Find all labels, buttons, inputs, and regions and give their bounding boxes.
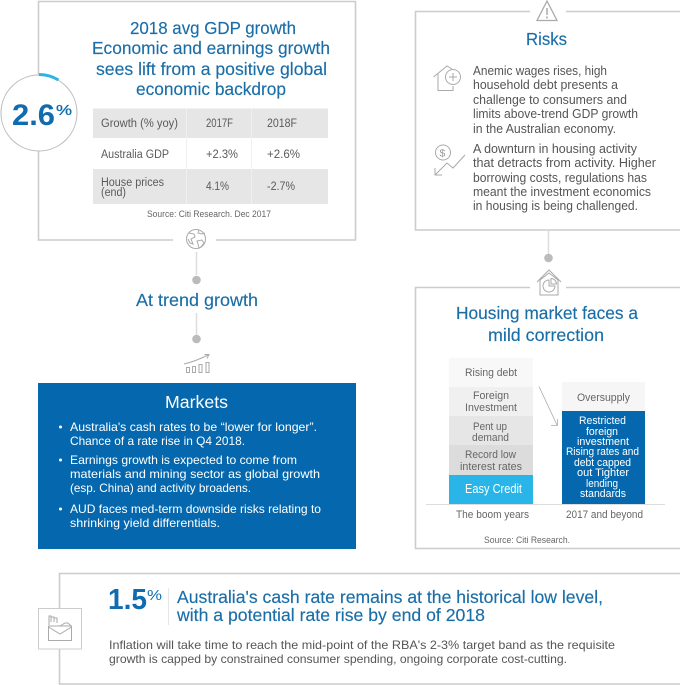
- panel: risks: [416, 1, 680, 230]
- callout: 2.6%: %: [56, 102, 72, 119]
- text: wages and debt risk: [473, 64, 638, 136]
- text: housing downturn risk: in housing is being challenged.: [473, 199, 638, 213]
- bullet: cash rates: Australia's cash rates to be “lower for longer”.: [70, 420, 317, 434]
- heading: risks: Risks: [526, 29, 567, 49]
- callout: 1.5%: %: [147, 587, 162, 604]
- icon: globe: [186, 230, 206, 248]
- panel: housing market: [416, 270, 680, 548]
- panel: GDP growth: [38, 2, 356, 240]
- heading: housing market: Housing market faces a: [456, 303, 638, 323]
- table: growth forecasts: [93, 108, 328, 204]
- table: growth forecasts: House prices: [101, 177, 164, 189]
- panel: markets: [38, 383, 356, 549]
- bullet: cash rates: Chance of a rate rise in Q4 2018.: [70, 434, 245, 448]
- text: wages and debt risk: challenge to consumers and: [473, 93, 627, 107]
- heading: cash rate: [176, 587, 603, 625]
- text: wages and debt risk: household debt presents a: [473, 78, 618, 92]
- heading: cash rate: Australia's cash rate remains at the historical low level,: [177, 587, 603, 607]
- bullet: earnings growth: materials and mining sector as global growth: [70, 467, 320, 481]
- heading: at trend growth: At trend growth: [136, 290, 258, 310]
- chart: boom years stack: Foreign: [473, 390, 509, 402]
- chart: boom years stack: Investment: [465, 402, 517, 414]
- chart: boom years stack: Rising debt: [465, 367, 517, 379]
- bullet: earnings growth: [59, 453, 320, 495]
- icon: house with plus: [434, 66, 460, 90]
- connector: risks to housing: [544, 230, 553, 262]
- chart: 2017 and beyond stack: investment: [577, 436, 629, 448]
- text: inflation outlook: growth is capped by constrained consumer spending, ongoing corporate cost-cutting.: [109, 652, 567, 666]
- chart: boom years stack: interest rates: [460, 461, 522, 473]
- icon: house with pie chart: [537, 270, 561, 295]
- callout: 2.6%: 2.6: [12, 99, 55, 132]
- chart: 2017 and beyond stack: Restricted: [579, 415, 626, 427]
- source note: Source: Citi Research.: [484, 535, 570, 545]
- text: wages and debt risk: limits above-trend GDP growth: [473, 107, 638, 121]
- callout: 1.5%: 1.5: [108, 584, 147, 616]
- source note: Source: Citi Research. Dec 2017: [147, 209, 271, 219]
- text: housing downturn risk: meant the investment economics: [473, 185, 651, 199]
- icon: dollar with falling arrow: [435, 145, 465, 175]
- table: growth forecasts: (end): [101, 187, 126, 199]
- heading: cash rate: with a potential rate rise by end of 2018: [176, 605, 485, 625]
- chart: 2017 and beyond stack: foreign: [586, 426, 618, 438]
- text: housing downturn risk: borrowing costs, regulations has: [473, 171, 647, 185]
- text: wages and debt risk: Anemic wages rises, high: [473, 64, 607, 78]
- table: growth forecasts: 4.1%: [206, 181, 229, 193]
- chart: 2017 and beyond stack: debt capped: [574, 457, 631, 469]
- bullet: AUD risks: [59, 502, 321, 530]
- chart: 2017 and beyond stack: Oversupply: [577, 392, 630, 404]
- table: growth forecasts: -2.7%: [267, 181, 295, 193]
- heading: GDP growth: Economic and earnings growth: [92, 38, 330, 58]
- table: growth forecasts: +2.6%: [267, 149, 300, 161]
- table: growth forecasts: 2017F: [206, 118, 233, 130]
- chart: boom years stack: Pent up: [473, 421, 507, 433]
- heading: housing market: [456, 303, 638, 345]
- icon: rising bar chart: [184, 354, 209, 372]
- connector: globe to trend: [192, 252, 201, 284]
- heading: GDP growth: economic backdrop: [136, 79, 286, 99]
- bullet: earnings growth: (esp. China) and activity broadens.: [70, 481, 251, 495]
- connector: trend to markets: [192, 313, 201, 343]
- heading: GDP growth: 2018 avg GDP growth: [130, 18, 296, 38]
- chart axis: [426, 504, 665, 506]
- bullet: AUD risks: AUD faces med-term downside risks relating to: [70, 502, 321, 516]
- chart: 2017 and beyond stack: lending: [586, 478, 618, 490]
- table: growth forecasts: 2018F: [267, 118, 297, 130]
- icon: warning triangle: [537, 1, 557, 20]
- text: wages and debt risk: in the Australian economy.: [473, 122, 616, 136]
- callout: 2.6%: [1, 74, 77, 151]
- table: growth forecasts: Growth (% yoy): [101, 118, 178, 130]
- bullet: AUD risks: shrinking yield differentials.: [70, 516, 220, 530]
- heading: GDP growth: sees lift from a positive global: [96, 59, 327, 79]
- icon: dollar with falling arrow: $: [440, 148, 446, 160]
- panel: cash rate: [38, 574, 680, 684]
- chart: boom years stack: [449, 358, 533, 504]
- chart: boom years stack: Easy Credit: [465, 482, 522, 496]
- bullet: earnings growth: Earnings growth is expected to come from: [70, 453, 297, 467]
- chart: boom years stack: demand: [472, 432, 509, 444]
- arrow: boom to beyond: [539, 386, 558, 426]
- text: housing downturn risk: A downturn in housing activity: [473, 142, 638, 156]
- text: housing downturn risk: [473, 142, 656, 213]
- heading: GDP growth: [92, 18, 330, 99]
- icon: hand and envelope: [38, 608, 82, 649]
- text: housing downturn risk: that detracts from activity. Higher: [473, 156, 656, 170]
- table: growth forecasts: Australia GDP: [101, 149, 169, 161]
- label: 2017 and beyond: 2017 and beyond: [566, 509, 643, 521]
- chart: boom years stack: Record low: [465, 449, 516, 461]
- heading: markets: Markets: [165, 392, 228, 412]
- heading: housing market: mild correction: [488, 325, 604, 345]
- text: inflation outlook: Inflation will take time to reach the mid-point of the RBA's 2-3% target band as the requisite: [109, 638, 615, 652]
- bullet: cash rates: [59, 420, 317, 448]
- table: growth forecasts: +2.3%: [206, 149, 238, 161]
- chart: 2017 and beyond stack: Rising rates and: [566, 446, 639, 458]
- chart: 2017 and beyond stack: [562, 382, 645, 504]
- chart: 2017 and beyond stack: standards: [580, 488, 626, 500]
- chart: 2017 and beyond stack: out Tighter: [577, 467, 629, 479]
- text: inflation outlook: [109, 638, 615, 666]
- label: the boom years: The boom years: [456, 509, 529, 521]
